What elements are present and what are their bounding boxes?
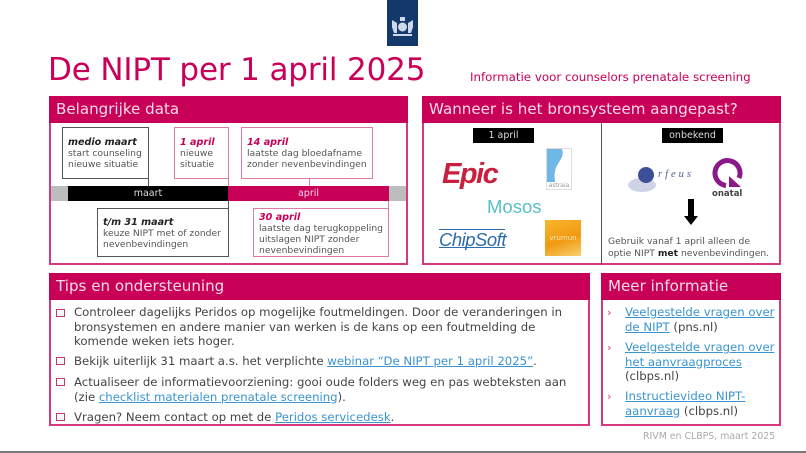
tip 3: Actualiseer de informatievoorziening: gooi oude folders weg en pas webteksten aan xyxy=(74,375,566,389)
date box: 30 april xyxy=(253,208,389,257)
date box: 14 april xyxy=(241,127,373,179)
link 2: Veelgestelde vragen over xyxy=(625,340,774,354)
date box: 1 april: nieuwe xyxy=(180,148,213,159)
tip 2: Bekijk uiterlijk 31 maart a.s. het verplichte webinar “De NIPT per 1 april 2025”. xyxy=(74,354,537,368)
date box: medio maart: start counseling xyxy=(68,148,142,159)
arrow: down xyxy=(684,199,698,225)
link 3: aanvraag (clbps.nl) xyxy=(625,404,738,418)
logo: vrumun xyxy=(545,220,581,256)
link 1: de NIPT (pns.nl) xyxy=(625,320,718,334)
label: onbekend: onbekend xyxy=(669,130,716,141)
heading: Belangrijke data xyxy=(49,96,408,123)
date box: 1 april: situatie xyxy=(180,159,214,170)
date box: 30 april: nevenbevindingen xyxy=(259,245,344,256)
panel: Tips en ondersteuning xyxy=(49,273,590,426)
timeline: maart xyxy=(68,186,228,201)
logo: Epic: Epic xyxy=(442,158,497,190)
chevron markers: › xyxy=(607,341,612,354)
onatal wordmark: onatal xyxy=(712,189,742,199)
date box: medio maart xyxy=(62,127,149,179)
tip 1: komende weken iets hoger. xyxy=(74,334,235,348)
panel: Belangrijke data xyxy=(49,96,408,265)
heading: Belangrijke data: Belangrijke data xyxy=(56,100,179,118)
note: NIPT met nevenbevindingen: optie NIPT met nevenbevindingen. xyxy=(608,248,769,258)
link 1 xyxy=(625,305,774,334)
heading: Wanneer is het bronsysteem aangepast xyxy=(422,96,781,123)
logo: Rijksoverheid xyxy=(387,0,418,46)
heading: Meer informatie: Meer informatie xyxy=(608,277,728,295)
timeline: april xyxy=(228,186,389,201)
panel: Wanneer is het bronsysteem aangepast xyxy=(422,96,781,265)
astraia label: astraia xyxy=(549,182,569,189)
date box: 14 april: laatste dag bloedafname xyxy=(247,148,362,159)
note: NIPT met nevenbevindingen xyxy=(608,236,769,258)
link 3 xyxy=(625,389,746,418)
tip 3: (zie checklist materialen prenatale screening). xyxy=(74,390,346,404)
logo: ChipSoft: ChipSoft xyxy=(439,229,506,250)
logo: Orfeus xyxy=(628,167,694,192)
subtitle: Informatie voor counselors prenatale screening xyxy=(470,70,751,84)
logo: vrumun: vrumun xyxy=(549,234,577,242)
chevron markers: › xyxy=(607,390,612,403)
bottom rule xyxy=(0,451,806,453)
tip 1: bronsystemen en andere manier van werken is de kans op een foutmelding de xyxy=(74,320,535,334)
date box: medio maart: medio maart xyxy=(68,137,137,148)
heading: Tips en ondersteuning xyxy=(49,273,590,300)
heading: Meer informatie xyxy=(601,273,781,300)
date box: 14 april: zonder nevenbevindingen xyxy=(247,159,367,170)
logo: Onatal xyxy=(712,158,743,199)
tip 1 xyxy=(74,305,562,348)
date box: 1 april xyxy=(174,127,229,179)
timeline bar xyxy=(51,186,406,201)
label: 1 april: 1 april xyxy=(488,130,519,141)
title: De NIPT per 1 april 2025 xyxy=(48,52,425,88)
date box: t/m 31 maart: nevenbevindingen xyxy=(103,239,188,250)
link 2 xyxy=(625,340,774,383)
link 2: (clbps.nl) xyxy=(625,369,679,383)
connector lines xyxy=(148,178,149,186)
bullet markers xyxy=(56,309,65,421)
panel: Meer informatie xyxy=(601,273,781,426)
column divider xyxy=(601,123,602,265)
link 3: Instructievideo NIPT- xyxy=(625,389,745,403)
tip 1: Controleer dagelijks Peridos op mogelijke foutmeldingen. Door de veranderingen in xyxy=(74,305,562,319)
tip 4: Vragen? Neem contact op met de Peridos servicedesk. xyxy=(74,410,394,424)
label: 1 april xyxy=(473,128,534,143)
logo: Mosos: Mosos xyxy=(487,196,542,217)
heading: Wanneer is het bronsysteem aangepast: Wanneer is het bronsysteem aangepast? xyxy=(429,100,738,118)
chevron markers xyxy=(607,306,612,403)
timeline: april: april xyxy=(298,188,319,199)
date box: medio maart: nieuwe situatie xyxy=(68,159,138,170)
label: onbekend xyxy=(662,128,723,143)
date box: 30 april: laatste dag terugkoppeling xyxy=(259,223,383,234)
link 1: Veelgestelde vragen over xyxy=(625,305,774,319)
orfeus wordmark: rfeus xyxy=(658,169,694,180)
date box: t/m 31 maart xyxy=(97,208,229,257)
date box: 1 april: 1 april xyxy=(180,137,215,148)
logo: astraia xyxy=(546,148,572,190)
tip 3 xyxy=(74,375,566,404)
date box: 30 april: 30 april xyxy=(259,212,300,223)
note: NIPT met nevenbevindingen: Gebruik vanaf 1 april alleen de xyxy=(608,236,750,247)
date box: 30 april: uitslagen NIPT zonder xyxy=(259,234,359,245)
link 2: het aanvraagproces xyxy=(625,355,742,369)
timeline: maart: maart xyxy=(134,188,162,199)
heading: Tips en ondersteuning: Tips en ondersteuning xyxy=(56,277,224,295)
date box: t/m 31 maart: keuze NIPT met of zonder xyxy=(103,228,221,239)
date box: 14 april: 14 april xyxy=(247,137,288,148)
date box: t/m 31 maart: t/m 31 maart xyxy=(103,217,173,228)
chevron markers: › xyxy=(607,306,612,319)
credit: RIVM en CLBPS, maart 2025 xyxy=(643,431,775,442)
